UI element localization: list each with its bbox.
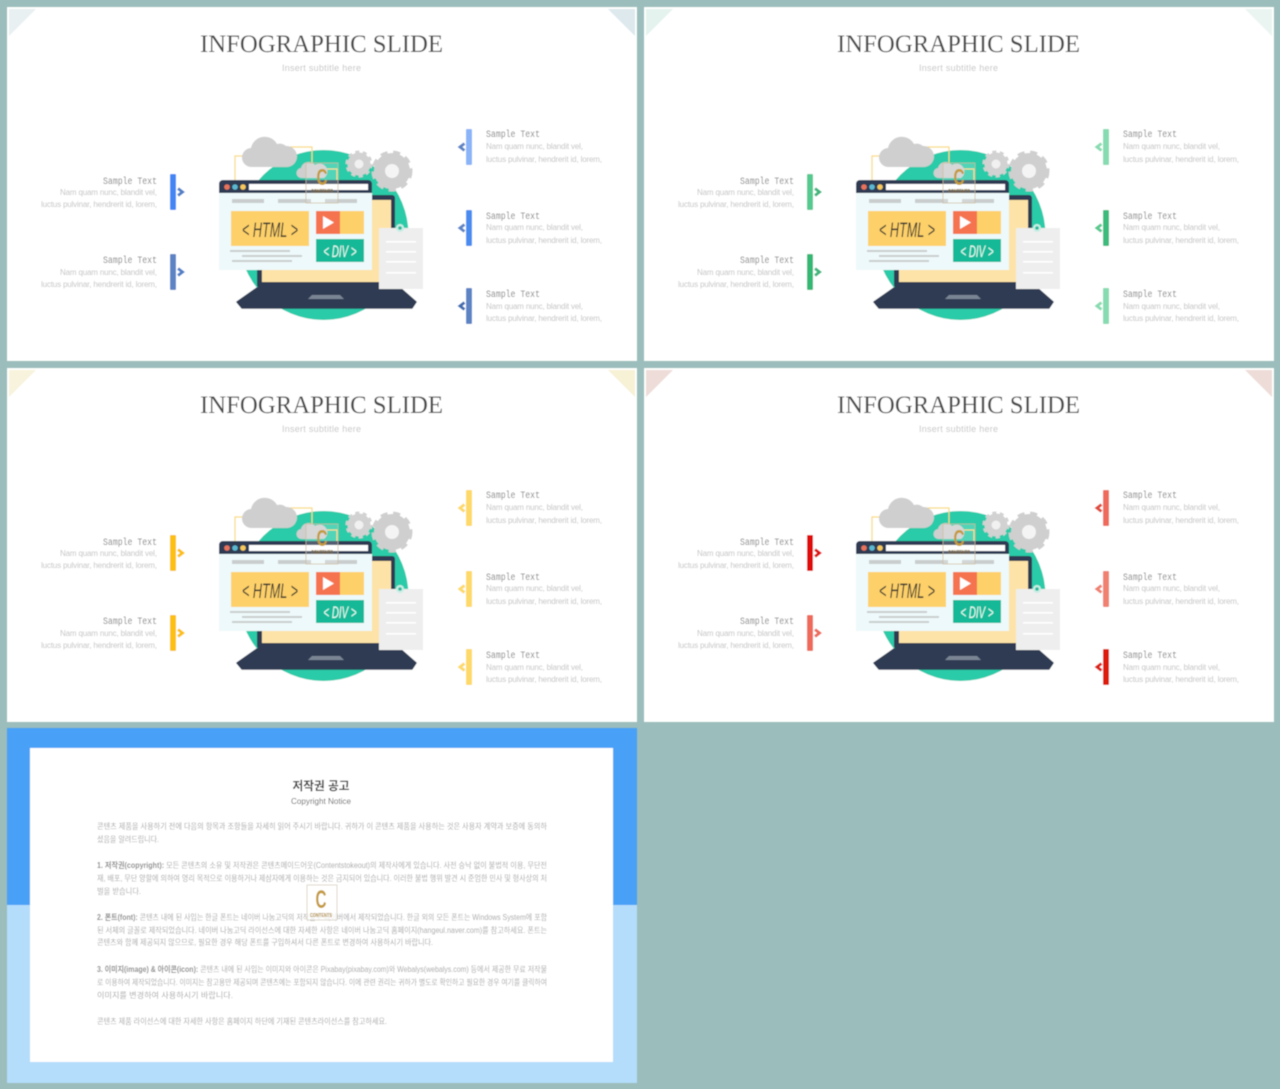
image and icon paragraph: 로 이용하여 제작되었습니다. 이미지는 참고용만 제공되며 콘텐츠에는 포함되지 않습니다. 이에 관련 권리는 귀하가 별도로 확인하고 필요한 경우 여기를 클릭하여 xyxy=(97,977,547,987)
right item 2: Sample Text xyxy=(1123,211,1177,223)
right item 2: Sample Text xyxy=(486,572,540,584)
right item 3 xyxy=(460,649,602,685)
right item 1: Sample Text xyxy=(1123,490,1177,502)
right item 2: luctus pulvinar, hendrerit id, lorem, xyxy=(1123,597,1239,606)
illustration: web development laptop: CONTENTS xyxy=(311,189,334,195)
title: INFOGRAPHIC SLIDE xyxy=(837,31,1080,58)
illustration: web development laptop: C xyxy=(316,164,328,190)
watermark logo xyxy=(307,885,337,920)
right item 3: luctus pulvinar, hendrerit id, lorem, xyxy=(486,314,602,323)
left item 1: luctus pulvinar, hendrerit id, lorem, xyxy=(41,561,157,570)
copyright paragraph: 재, 배포, 무단 양할에 의하여 영리 목적으로 이용하거나 제삼자에게 이용하는 것은 금지되어 있습니다. 이러한 불법 행위 발견 시 준엄한 민사 및 형사상의 처 xyxy=(97,873,547,883)
right item 1 xyxy=(1097,129,1239,165)
font paragraph: 된 서체의 글꼴로 제작되었습니다. 네이버 나눔고딕 라이선스에 대한 자세한 사항은 네이버 나눔고딕 홈페이지(hangeul.naver.com)를 참고하세요. 폰트는 xyxy=(97,925,547,935)
copyright subheading: Copyright Notice xyxy=(291,796,351,806)
right item 3 xyxy=(1097,649,1239,685)
right item 1: luctus pulvinar, hendrerit id, lorem, xyxy=(486,516,602,525)
right item 3: Sample Text xyxy=(1123,650,1177,662)
right item 1 xyxy=(460,129,602,165)
image and icon paragraph: 3. 이미지(image) & 아이콘(icon): 콘텐츠 내에 된 사입는 이미지와 아이콘은 Pixabay(pixabay.com)와 Webalys(webalys.com) 등에서 제공한 무료 저작물 xyxy=(97,964,547,974)
right item 2: luctus pulvinar, hendrerit id, lorem, xyxy=(1123,236,1239,245)
right item 3: Nam quam nunc, blandit vel, xyxy=(486,663,583,672)
subtitle: Insert subtitle here xyxy=(919,424,998,434)
left item 1: Sample Text xyxy=(740,176,794,188)
illustration: web development laptop: CONTENTS xyxy=(311,550,334,556)
right item 3 xyxy=(1097,288,1239,324)
watermark logo: C xyxy=(316,886,326,914)
right item 3: Sample Text xyxy=(486,650,540,662)
right item 2: Sample Text xyxy=(486,211,540,223)
left item 2: Nam quam nunc, blandit vel, xyxy=(60,629,157,638)
illustration: web development laptop xyxy=(219,498,423,681)
font paragraph: 콘텐츠와 함께 제공되지 않으므로, 필요한 경우 해당 폰트를 구입하셔서 다른 폰트로 변경하여 사용하시기 바랍니다. xyxy=(97,937,433,947)
left item 2: luctus pulvinar, hendrerit id, lorem, xyxy=(41,280,157,289)
title: INFOGRAPHIC SLIDE xyxy=(837,392,1080,419)
left item 2: Nam quam nunc, blandit vel, xyxy=(697,629,794,638)
left item 2 xyxy=(678,254,820,290)
left item 2 xyxy=(41,254,182,290)
left item 2: luctus pulvinar, hendrerit id, lorem, xyxy=(678,280,794,289)
right item 1 xyxy=(460,490,602,526)
illustration: web development laptop: < HTML > xyxy=(242,580,298,603)
right item 2 xyxy=(460,571,602,607)
right item 2 xyxy=(1097,210,1239,246)
illustration: web development laptop: < DIV > xyxy=(960,242,994,261)
right item 1: luctus pulvinar, hendrerit id, lorem, xyxy=(1123,155,1239,164)
right item 3: luctus pulvinar, hendrerit id, lorem, xyxy=(1123,314,1239,323)
left item 2: Sample Text xyxy=(740,255,794,267)
right item 3: Nam quam nunc, blandit vel, xyxy=(486,302,583,311)
left item 2 xyxy=(678,615,820,651)
illustration: web development laptop: < HTML > xyxy=(242,219,298,242)
panel: red slide xyxy=(644,368,1274,722)
left item 1: Nam quam nunc, blandit vel, xyxy=(60,549,157,558)
left item 1: luctus pulvinar, hendrerit id, lorem, xyxy=(678,200,794,209)
panel: yellow slide xyxy=(7,368,637,722)
subtitle: Insert subtitle here xyxy=(282,63,361,73)
subtitle: Insert subtitle here xyxy=(919,63,998,73)
copyright heading: 저작권 공고 xyxy=(292,778,350,793)
left item 2: Sample Text xyxy=(103,255,157,267)
right item 2: Nam quam nunc, blandit vel, xyxy=(1123,223,1220,232)
intro paragraph: 콘텐츠 제품을 사용하기 전에 다음의 항목과 조항들을 자세히 읽어 주시기 바랍니다. 귀하가 이 콘텐츠 제품을 사용하는 것은 사용자 계약과 보증에 동의하 xyxy=(97,821,548,831)
illustration: web development laptop: < DIV > xyxy=(960,603,994,622)
image and icon paragraph: 이미지를 변경하여 사용하시기 바랍니다. xyxy=(97,990,233,1000)
right item 1: Nam quam nunc, blandit vel, xyxy=(1123,142,1220,151)
right item 3: Nam quam nunc, blandit vel, xyxy=(1123,302,1220,311)
left item 1: Nam quam nunc, blandit vel, xyxy=(60,188,157,197)
right item 2 xyxy=(460,210,602,246)
left item 1 xyxy=(678,174,820,210)
copyright paragraph xyxy=(97,860,547,896)
right item 2: Nam quam nunc, blandit vel, xyxy=(486,223,583,232)
subtitle: Insert subtitle here xyxy=(282,424,361,434)
right item 3 xyxy=(460,288,602,324)
illustration: web development laptop xyxy=(219,137,423,320)
right item 2: Nam quam nunc, blandit vel, xyxy=(1123,584,1220,593)
right item 2 xyxy=(1097,571,1239,607)
left item 1: Sample Text xyxy=(103,176,157,188)
left item 2 xyxy=(41,615,182,651)
right item 2: luctus pulvinar, hendrerit id, lorem, xyxy=(486,597,602,606)
right item 1: luctus pulvinar, hendrerit id, lorem, xyxy=(1123,516,1239,525)
image and icon paragraph xyxy=(97,964,547,1000)
left item 1: Sample Text xyxy=(740,537,794,549)
right item 1: Nam quam nunc, blandit vel, xyxy=(1123,503,1220,512)
illustration: web development laptop: < HTML > xyxy=(879,580,935,603)
left item 1: Nam quam nunc, blandit vel, xyxy=(697,188,794,197)
right item 1: Nam quam nunc, blandit vel, xyxy=(486,503,583,512)
illustration: web development laptop: < DIV > xyxy=(324,242,357,261)
font paragraph xyxy=(97,912,548,947)
right item 1: Sample Text xyxy=(486,129,540,141)
right item 3: luctus pulvinar, hendrerit id, lorem, xyxy=(486,675,602,684)
right item 1: luctus pulvinar, hendrerit id, lorem, xyxy=(486,155,602,164)
left item 2: Sample Text xyxy=(103,616,157,628)
right item 3: Sample Text xyxy=(486,289,540,301)
left item 2: Nam quam nunc, blandit vel, xyxy=(697,268,794,277)
right item 3: luctus pulvinar, hendrerit id, lorem, xyxy=(1123,675,1239,684)
title: INFOGRAPHIC SLIDE xyxy=(200,31,443,58)
illustration: web development laptop: C xyxy=(316,525,328,551)
illustration: web development laptop: < HTML > xyxy=(879,219,935,242)
left item 2: luctus pulvinar, hendrerit id, lorem, xyxy=(678,641,794,650)
left item 1: luctus pulvinar, hendrerit id, lorem, xyxy=(678,561,794,570)
title: INFOGRAPHIC SLIDE xyxy=(200,392,443,419)
illustration: web development laptop xyxy=(856,137,1060,320)
copyright paragraph: 벌을 받습니다. xyxy=(97,886,141,896)
right item 2: luctus pulvinar, hendrerit id, lorem, xyxy=(486,236,602,245)
left item 1 xyxy=(41,535,182,571)
left item 1: Nam quam nunc, blandit vel, xyxy=(697,549,794,558)
font paragraph: 2. 폰트(font): 콘텐츠 내에 된 사입는 한글 폰트는 네이버 나눔고딕의 저작물로 네이버에서 제작되었습니다. 한글 외의 모든 폰트는 Windows System에 포함 xyxy=(97,912,548,922)
right item 3: Sample Text xyxy=(1123,289,1177,301)
illustration: web development laptop: < DIV > xyxy=(324,603,357,622)
left item 1: Sample Text xyxy=(103,537,157,549)
right item 1: Nam quam nunc, blandit vel, xyxy=(486,142,583,151)
left item 2: luctus pulvinar, hendrerit id, lorem, xyxy=(41,641,157,650)
license paragraph: 콘텐츠 제품 라이선스에 대한 자세한 사항은 홈페이지 하단에 기재된 콘텐츠라이선스를 참고하세요. xyxy=(97,1016,387,1026)
left item 1 xyxy=(678,535,820,571)
illustration: web development laptop: C xyxy=(954,525,964,551)
illustration: web development laptop: CONTENTS xyxy=(948,189,971,195)
right item 2: Sample Text xyxy=(1123,572,1177,584)
copyright paragraph: 1. 저작권(copyright): 모든 콘텐츠의 소유 및 저작권은 콘텐츠메이드어웃(Contentstokeout)의 제작사에게 있습니다. 사전 승낙 없이 불법적 이용, 무단전 xyxy=(97,860,547,870)
left item 1: luctus pulvinar, hendrerit id, lorem, xyxy=(41,200,157,209)
right item 3: Nam quam nunc, blandit vel, xyxy=(1123,663,1220,672)
intro paragraph xyxy=(97,821,548,844)
illustration: web development laptop xyxy=(856,498,1060,681)
panel: blue slide xyxy=(7,7,637,361)
watermark logo: CONTENTS xyxy=(310,913,333,919)
left item 2: Nam quam nunc, blandit vel, xyxy=(60,268,157,277)
right item 1: Sample Text xyxy=(486,490,540,502)
illustration: web development laptop: CONTENTS xyxy=(948,550,971,556)
panel: green slide xyxy=(644,7,1274,361)
right item 1: Sample Text xyxy=(1123,129,1177,141)
right item 1 xyxy=(1097,490,1239,526)
illustration: web development laptop: C xyxy=(954,164,964,190)
left item 1 xyxy=(41,174,182,210)
right item 2: Nam quam nunc, blandit vel, xyxy=(486,584,583,593)
panel: copyright notice xyxy=(7,728,637,1083)
intro paragraph: 셨음을 알려드립니다. xyxy=(97,834,159,844)
left item 2: Sample Text xyxy=(740,616,794,628)
